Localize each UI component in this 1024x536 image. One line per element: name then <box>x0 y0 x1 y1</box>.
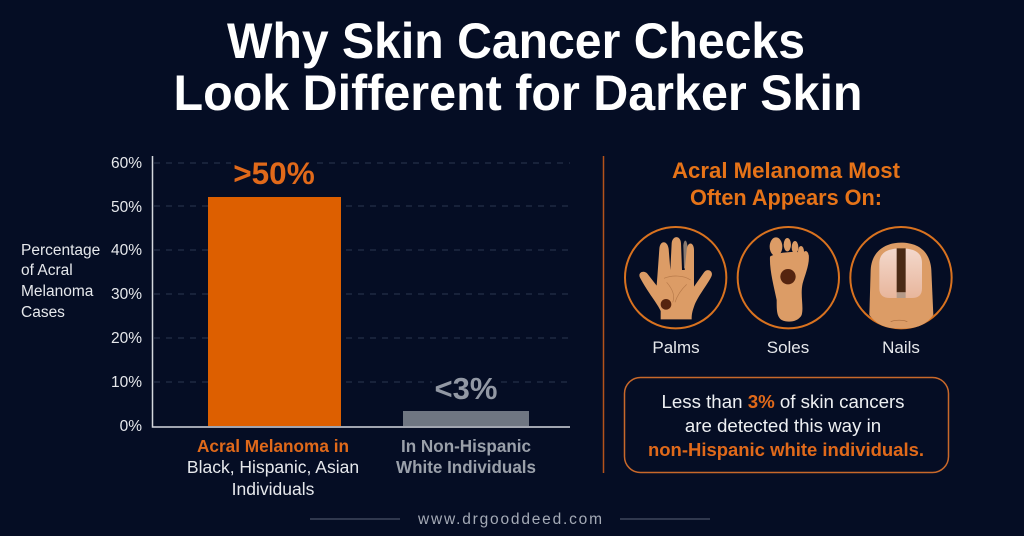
icon: palm <box>625 227 726 328</box>
category label: non-Hispanic white: White Individuals <box>396 457 536 477</box>
y-axis title: of Acral <box>21 262 73 279</box>
title: Look Different for Darker Skin <box>174 65 862 121</box>
value label: <3%: <3% <box>435 371 497 406</box>
callout: Less than 3% of skin cancers <box>661 391 905 412</box>
icon: sole <box>738 227 839 328</box>
footer: www.drgooddeed.com <box>417 511 602 528</box>
label: nails: Nails <box>882 338 920 357</box>
y-axis tick labels: 60% <box>111 155 142 172</box>
category label: acral melanoma: Individuals <box>232 479 315 499</box>
y-axis tick labels: 10% <box>111 374 142 391</box>
category label: non-Hispanic white: In Non-Hispanic <box>401 436 531 456</box>
y-axis tick labels: 30% <box>111 286 142 303</box>
y-axis title: Percentage <box>21 242 100 259</box>
value label: >50%: >50% <box>233 155 315 191</box>
label: soles: Soles <box>767 338 809 357</box>
callout: are detected this way in <box>685 415 881 436</box>
heading: appears on: Acral Melanoma Most <box>672 158 901 183</box>
bar: acral melanoma <box>208 197 341 426</box>
y-axis title: Cases <box>21 304 65 321</box>
bar chart <box>111 155 570 499</box>
category label: acral melanoma: Acral Melanoma in <box>197 436 349 456</box>
y-axis tick labels: 20% <box>111 330 142 347</box>
heading: appears on: Often Appears On: <box>690 185 882 210</box>
y-axis tick labels: 0% <box>120 418 142 435</box>
category label: acral melanoma <box>187 436 359 499</box>
title: Why Skin Cancer Checks <box>227 13 805 69</box>
y-axis title <box>21 242 100 321</box>
callout: non-Hispanic white individuals. <box>648 439 924 460</box>
icon: nail <box>850 227 952 329</box>
heading: appears on <box>672 158 901 210</box>
y-axis title: Melanoma <box>21 283 94 300</box>
category label: non-Hispanic white <box>396 436 536 477</box>
axes <box>152 156 570 427</box>
bar: non-Hispanic white <box>403 411 529 426</box>
title <box>174 13 862 121</box>
label: palms: Palms <box>652 338 700 357</box>
category label: acral melanoma: Black, Hispanic, Asian <box>187 457 359 477</box>
y-axis tick labels <box>111 155 142 435</box>
panel divider <box>602 156 604 473</box>
y-axis tick labels: 50% <box>111 199 142 216</box>
callout <box>624 378 948 472</box>
y-axis tick labels: 40% <box>111 242 142 259</box>
gridlines <box>154 163 570 382</box>
